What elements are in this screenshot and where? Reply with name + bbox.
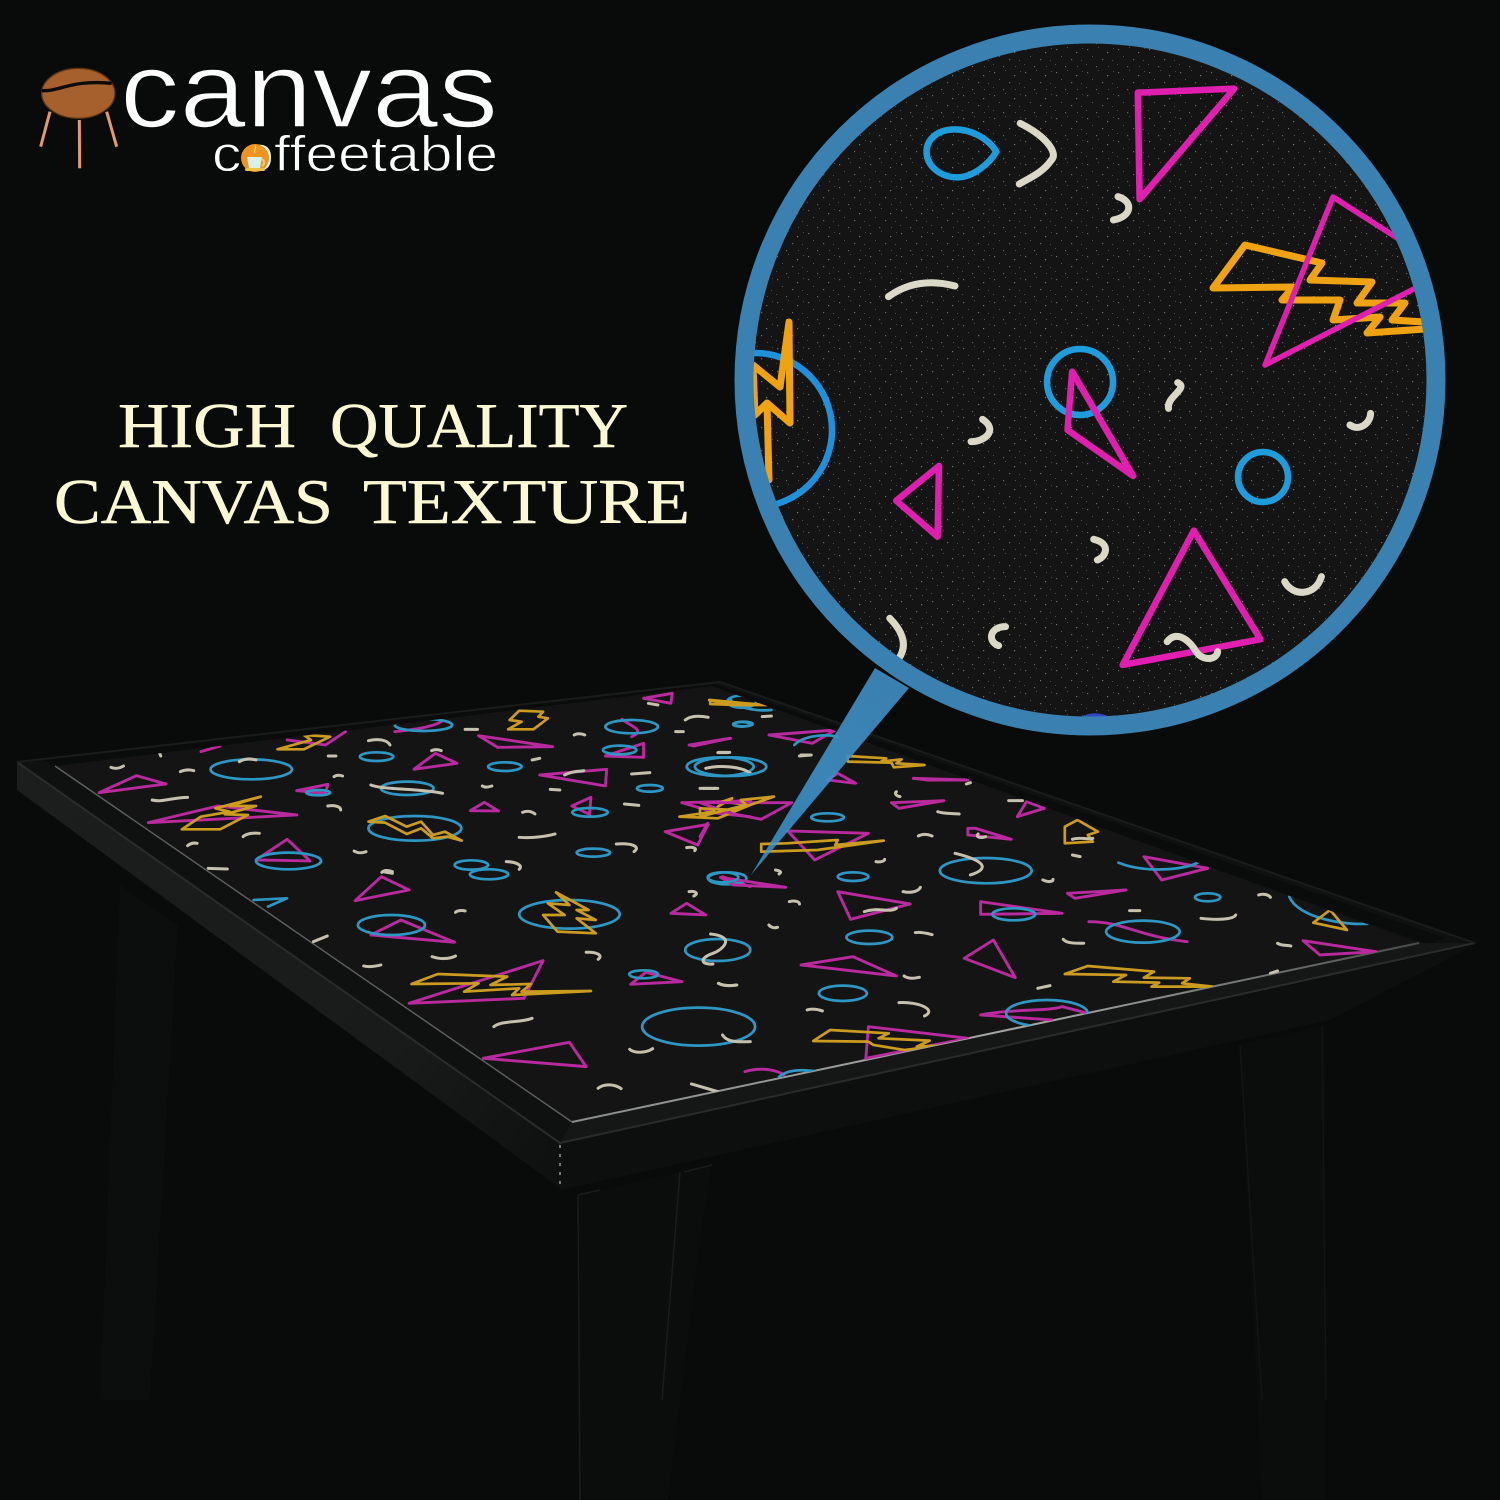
logo icon: coffee bean table bbox=[41, 68, 117, 168]
right half pattern bbox=[695, 698, 1376, 1077]
upper blue teardrop bbox=[927, 129, 996, 177]
lower lens shapes bbox=[890, 372, 1371, 733]
table legs bbox=[100, 885, 1326, 1500]
upper cream marks bbox=[888, 123, 1129, 297]
blue circles left bbox=[211, 696, 756, 1046]
canvas edge highlights bbox=[55, 766, 1419, 1122]
logo icon: coffee cup bbox=[241, 144, 269, 172]
upper magenta triangle bbox=[1138, 89, 1234, 199]
callout pointer bbox=[751, 668, 909, 875]
lower magenta triangles bbox=[896, 372, 1260, 665]
table canvas surface bbox=[55, 686, 1419, 1122]
table pattern bbox=[99, 693, 1376, 1092]
upper lens shapes bbox=[888, 89, 1234, 297]
left half pattern bbox=[99, 693, 756, 1092]
logo bbox=[41, 29, 498, 182]
magnified canvas texture callout bbox=[678, 34, 1449, 733]
lens fill bbox=[750, 40, 1430, 720]
lens ring bbox=[744, 34, 1436, 726]
blue circles right bbox=[695, 698, 1373, 1077]
heading line 1: HIGH bbox=[118, 390, 296, 461]
gold bolts right bbox=[700, 700, 1347, 1050]
gold bolts left bbox=[182, 700, 750, 995]
lower cream marks bbox=[890, 383, 1371, 659]
heading line 2: CANVAS bbox=[54, 466, 333, 537]
heading line 1: QUALITY bbox=[330, 390, 628, 461]
heading bbox=[54, 390, 690, 537]
heading line 1 bbox=[118, 390, 628, 461]
cream marks left bbox=[111, 703, 750, 1092]
lens pattern bbox=[754, 85, 1424, 716]
heading line 2: TEXTURE bbox=[363, 466, 690, 537]
heading line 2 bbox=[54, 466, 690, 537]
magenta triangles right bbox=[700, 730, 1376, 1075]
logo tagline: coffeetable: coffeetable bbox=[212, 126, 498, 182]
table top frame bbox=[17, 682, 1475, 1190]
lens shapes at page coordinates bbox=[754, 194, 1424, 507]
magenta triangles left bbox=[99, 693, 750, 1067]
cream marks right bbox=[700, 716, 1291, 1016]
logo wordmark: canvas: canvas bbox=[120, 29, 498, 150]
lower blue fragment bbox=[1082, 713, 1108, 716]
